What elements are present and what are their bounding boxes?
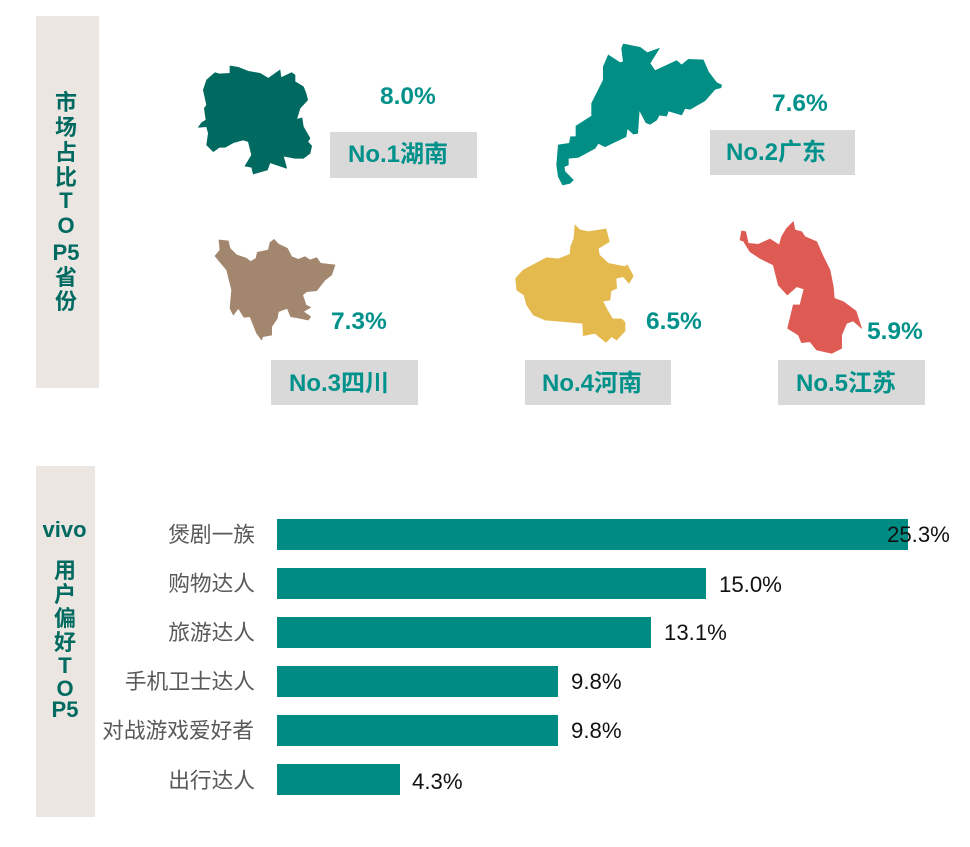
value: Guangdong share: 7.6% — [772, 90, 828, 117]
label: No.2 Guangdong — [710, 130, 855, 175]
panel: province market share — [36, 16, 925, 405]
label: No.5 Jiangsu — [778, 360, 925, 405]
heading panel: vivo user preference top 5: 偏 — [54, 606, 76, 631]
label: No.5 Jiangsu: No.5江苏 — [796, 370, 896, 397]
heading panel: market share top 5 provinces: T — [59, 188, 73, 213]
map: Hunan — [198, 66, 312, 174]
label: No.1 Hunan — [330, 132, 477, 178]
bar values: 9.8% — [571, 718, 622, 743]
heading panel: market share top 5 provinces: 场 — [55, 115, 77, 140]
value: Henan share: 6.5% — [646, 308, 702, 335]
value: Sichuan share: 7.3% — [331, 308, 387, 335]
heading panel: market share top 5 provinces: 市 — [55, 90, 77, 115]
label: No.3 Sichuan: No.3四川 — [289, 370, 389, 397]
panel: vivo user preferences — [36, 466, 950, 817]
label: No.3 Sichuan — [271, 360, 418, 405]
label: No.2 Guangdong: No.2广东 — [726, 139, 826, 166]
heading panel: market share top 5 provinces: P5 — [53, 240, 79, 265]
heading panel: vivo user preference top 5 — [36, 466, 95, 817]
label: No.1 Hunan: No.1湖南 — [348, 141, 448, 168]
category labels: 煲剧一族 — [168, 522, 255, 547]
heading panel: vivo user preference top 5: 好 — [54, 630, 76, 655]
label: No.4 Henan — [525, 360, 671, 405]
category labels: 旅游达人 — [168, 620, 255, 645]
bar chart — [102, 519, 950, 795]
heading panel: market share top 5 provinces: 省 — [55, 265, 77, 290]
heading panel: market share top 5 provinces: 占 — [55, 140, 77, 165]
bar values — [412, 522, 950, 794]
map: Sichuan — [215, 239, 335, 340]
map: Guangdong — [557, 44, 722, 185]
label: No.4 Henan: No.4河南 — [542, 370, 642, 397]
bars — [277, 519, 908, 795]
heading panel: vivo user preference top 5: P5 — [52, 697, 78, 722]
heading panel: vivo user preference top 5: O — [56, 676, 74, 701]
category labels: 对战游戏爱好者 — [102, 718, 254, 743]
heading panel: vivo user preference top 5: 用 — [54, 558, 76, 583]
bar values: 25.3% — [887, 522, 950, 547]
bar values: 9.8% — [571, 669, 622, 694]
heading panel: vivo user preference top 5: 户 — [54, 582, 76, 607]
value: Jiangsu share: 5.9% — [867, 318, 923, 345]
bar values: 4.3% — [412, 769, 463, 794]
heading panel: vivo user preference top 5: vivo — [42, 517, 87, 542]
map: Jiangsu — [740, 222, 862, 353]
category labels: 购物达人 — [168, 571, 255, 596]
bar values: 15.0% — [719, 572, 782, 597]
heading panel: vivo user preference top 5: T — [58, 653, 72, 678]
value: Hunan share: 8.0% — [380, 83, 436, 110]
category labels: 出行达人 — [168, 768, 255, 793]
bar values: 13.1% — [664, 620, 727, 645]
heading panel: market share top 5 provinces: 比 — [55, 165, 77, 190]
category labels — [102, 522, 255, 793]
heading panel: market share top 5 provinces: O — [57, 213, 75, 238]
category labels: 手机卫士达人 — [125, 669, 255, 694]
heading panel: market share top 5 provinces: 份 — [55, 289, 77, 314]
map: Henan — [516, 225, 633, 342]
heading panel: market share top 5 provinces — [36, 16, 99, 388]
